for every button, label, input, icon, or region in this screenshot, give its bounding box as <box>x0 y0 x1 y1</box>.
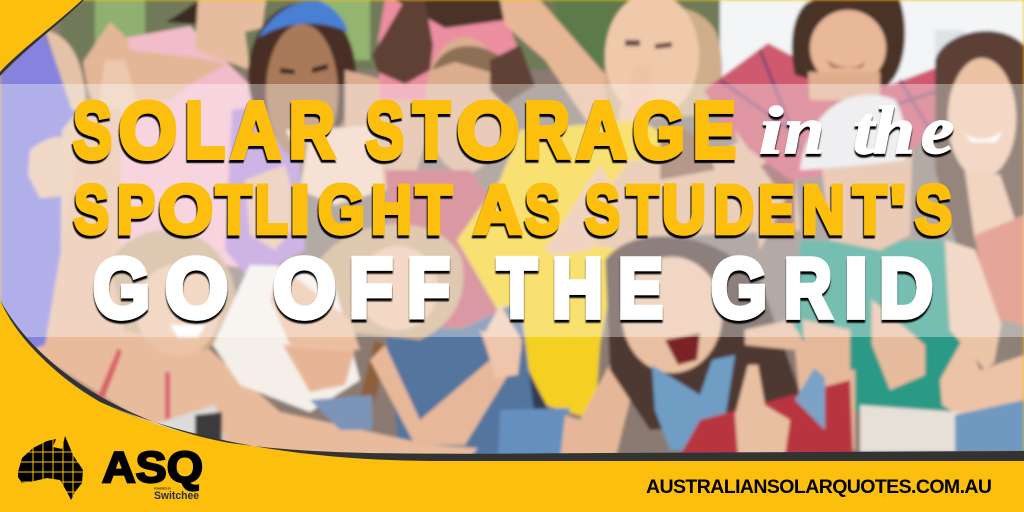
title line 2: Spotlight as Student's: S <box>525 171 560 248</box>
title line 3: Go off the grid: R <box>784 241 832 335</box>
title line 3: Go off the grid: G <box>711 241 767 335</box>
title: in the: i <box>759 92 783 168</box>
title line 3: Go off the grid: F <box>407 241 450 335</box>
title line 1: Solar Storage: O <box>119 86 177 174</box>
logo tagline: powered by: POWERED BY <box>154 488 171 490</box>
title line 2: Spotlight as Student's: L <box>255 171 288 248</box>
title line 1: Solar Storage: R <box>524 86 570 174</box>
title line 1: Solar Storage: L <box>185 86 225 174</box>
title line 3: Go off the grid: O <box>273 241 336 335</box>
logo: Switchee: Switchee <box>154 490 199 502</box>
title line 2: Spotlight as Student's: ' <box>890 171 906 248</box>
title line 3: Go off the grid: H <box>552 241 603 335</box>
title line 3: Go off the grid: I <box>844 241 868 335</box>
title line 1: Solar Storage: A <box>577 86 627 174</box>
title line 1: Solar Storage: E <box>693 86 736 174</box>
title: in the: h <box>873 92 915 168</box>
title: in the: n <box>784 92 824 168</box>
title line 2: Spotlight as Student's: S <box>585 171 620 248</box>
title: in the: t <box>853 92 876 168</box>
title line 2: Spotlight as Student's: U <box>662 171 706 248</box>
title line 1: Solar Storage: G <box>633 86 685 174</box>
title line 3: Go off the grid: G <box>93 241 150 335</box>
title line 2: Spotlight as Student's: T <box>853 171 887 248</box>
title line 2: Spotlight as Student's: S <box>915 171 952 248</box>
logo wordmark: ASQ: ASQ <box>102 443 203 492</box>
title line 2: Spotlight as Student's: E <box>758 171 795 248</box>
title line 3: Go off the grid: T <box>497 241 537 335</box>
title line 2: Spotlight as Student's: N <box>802 171 845 248</box>
title line 2: Spotlight as Student's: S <box>74 171 109 248</box>
translucent white title band <box>0 84 1024 337</box>
title line 3: Go off the grid: D <box>879 241 933 335</box>
title line 1: Solar Storage: T <box>413 86 450 174</box>
title line 1: Solar Storage: R <box>289 86 335 174</box>
title line 2: Spotlight as Student's: T <box>216 171 252 248</box>
title line 1: Solar Storage: S <box>73 86 112 174</box>
title line 2: Spotlight as Student's: I <box>290 171 310 248</box>
title line 1: Solar Storage: S <box>366 86 404 174</box>
title line 2: Spotlight as Student's: T <box>416 171 452 248</box>
title line 3: Go off the grid: E <box>618 241 663 335</box>
title line 2: Spotlight as Student's: P <box>117 171 155 248</box>
icon: Australia solar grid map <box>18 436 83 500</box>
title line 2: Spotlight as Student's: A <box>474 171 522 248</box>
title: in the: e <box>921 92 954 168</box>
title line 2: Spotlight as Student's: D <box>714 171 754 248</box>
title line 1: Solar Storage: O <box>457 86 519 174</box>
title line 2: Spotlight as Student's: H <box>371 171 412 248</box>
title line 2: Spotlight as Student's: G <box>318 171 365 248</box>
title line 2: Spotlight as Student's: O <box>159 171 213 248</box>
title line 1: Solar Storage: A <box>231 86 281 174</box>
title line 2: Spotlight as Student's: T <box>627 171 659 248</box>
website url: AUSTRALIANSOLARQUOTES.COM.AU <box>646 476 992 498</box>
title line 3: Go off the grid: O <box>165 241 228 335</box>
title line 3: Go off the grid: F <box>349 241 393 335</box>
